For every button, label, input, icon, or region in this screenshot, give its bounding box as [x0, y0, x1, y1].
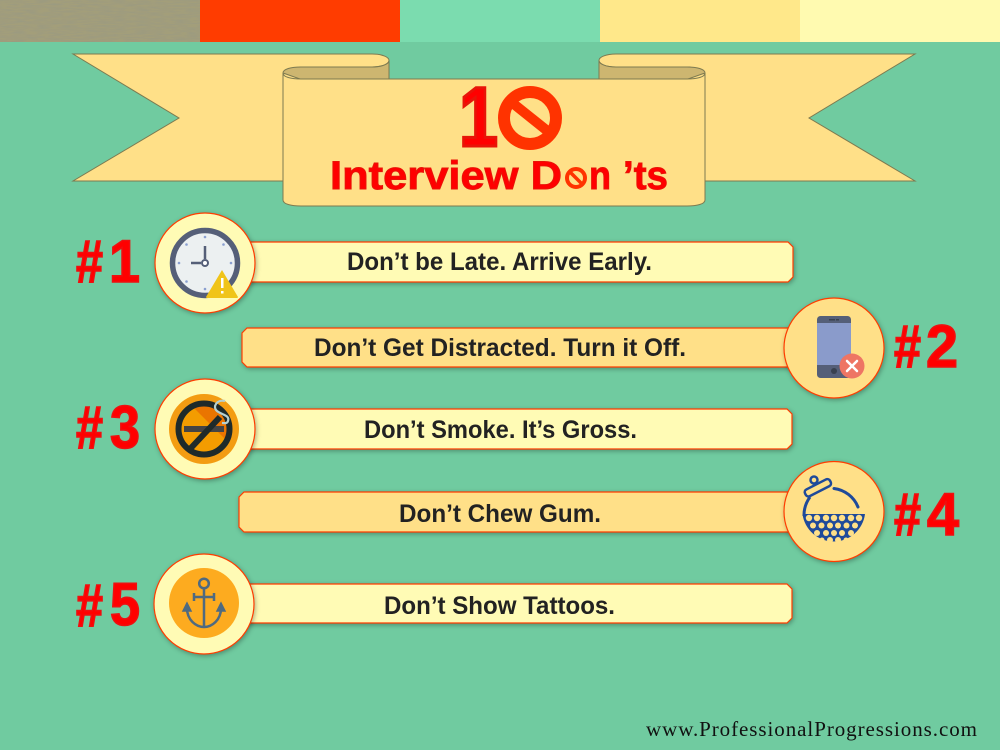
row 1 bar	[240, 242, 793, 282]
title: Interview Don'ts	[330, 154, 668, 198]
left fold	[283, 60, 389, 79]
row 5 text: Don’t Show Tattoos.	[384, 592, 615, 620]
row 4 number: 4	[927, 481, 960, 548]
icon: anchor	[169, 568, 239, 638]
icon: warning triangle	[206, 270, 238, 298]
title: Interview Don'ts: ’ts	[623, 154, 668, 198]
row 2 circle with phone icon	[784, 298, 884, 398]
row 2 bar	[242, 328, 790, 367]
row 1 circle with clock icon	[155, 213, 255, 313]
title: Interview Don'ts: Interview D	[330, 154, 562, 198]
row 5 number: #	[76, 572, 103, 639]
row 2 number: 2	[926, 313, 958, 380]
row 4 number: #	[894, 481, 921, 548]
row 3 bar	[240, 409, 792, 449]
ribbon centre panel	[283, 73, 705, 206]
row 5 number	[76, 571, 140, 639]
icon: gum jar	[802, 476, 865, 543]
row 3 circle with no-smoking icon	[155, 379, 255, 479]
row 2 text: Don’t Get Distracted. Turn it Off.	[314, 334, 686, 362]
icon: remove badge	[840, 354, 864, 378]
icon: no smoking	[169, 394, 239, 464]
colour palette strip	[0, 0, 1000, 42]
row 2 number: #	[894, 313, 921, 380]
row 5 circle with anchor icon	[154, 554, 254, 654]
website footer: www.ProfessionalProgressions.com	[646, 717, 977, 741]
row 3 text: Don’t Smoke. It’s Gross.	[364, 416, 637, 444]
row 1 number: #	[76, 228, 103, 295]
row 2 number	[894, 313, 958, 380]
big prohibition sign as zero	[504, 92, 556, 144]
title: 10	[459, 70, 556, 164]
row 3 number: 3	[110, 394, 140, 461]
small prohibition sign as letter o	[567, 169, 585, 187]
icon: phone	[817, 316, 851, 378]
row 4 number	[894, 481, 960, 548]
row 4 text: Don’t Chew Gum.	[399, 500, 601, 528]
row 4 circle with gum jar icon	[784, 462, 884, 562]
row 5 number: 5	[110, 571, 140, 638]
ribbon right tail	[599, 54, 915, 181]
row 1 number	[76, 228, 140, 295]
row 3 number	[76, 394, 140, 461]
row 3 number: #	[76, 394, 103, 461]
right fold	[599, 60, 705, 79]
title ribbon banner	[73, 54, 915, 206]
row 5 bar	[240, 584, 792, 623]
row 1 number: 1	[109, 228, 140, 295]
row 1 text: Don’t be Late. Arrive Early.	[347, 248, 652, 276]
icon: clock	[172, 230, 238, 296]
title: Interview Don'ts: n	[589, 154, 611, 198]
row 4 bar	[239, 492, 790, 532]
title: 10: 1	[459, 70, 498, 164]
ribbon left tail	[73, 54, 389, 181]
